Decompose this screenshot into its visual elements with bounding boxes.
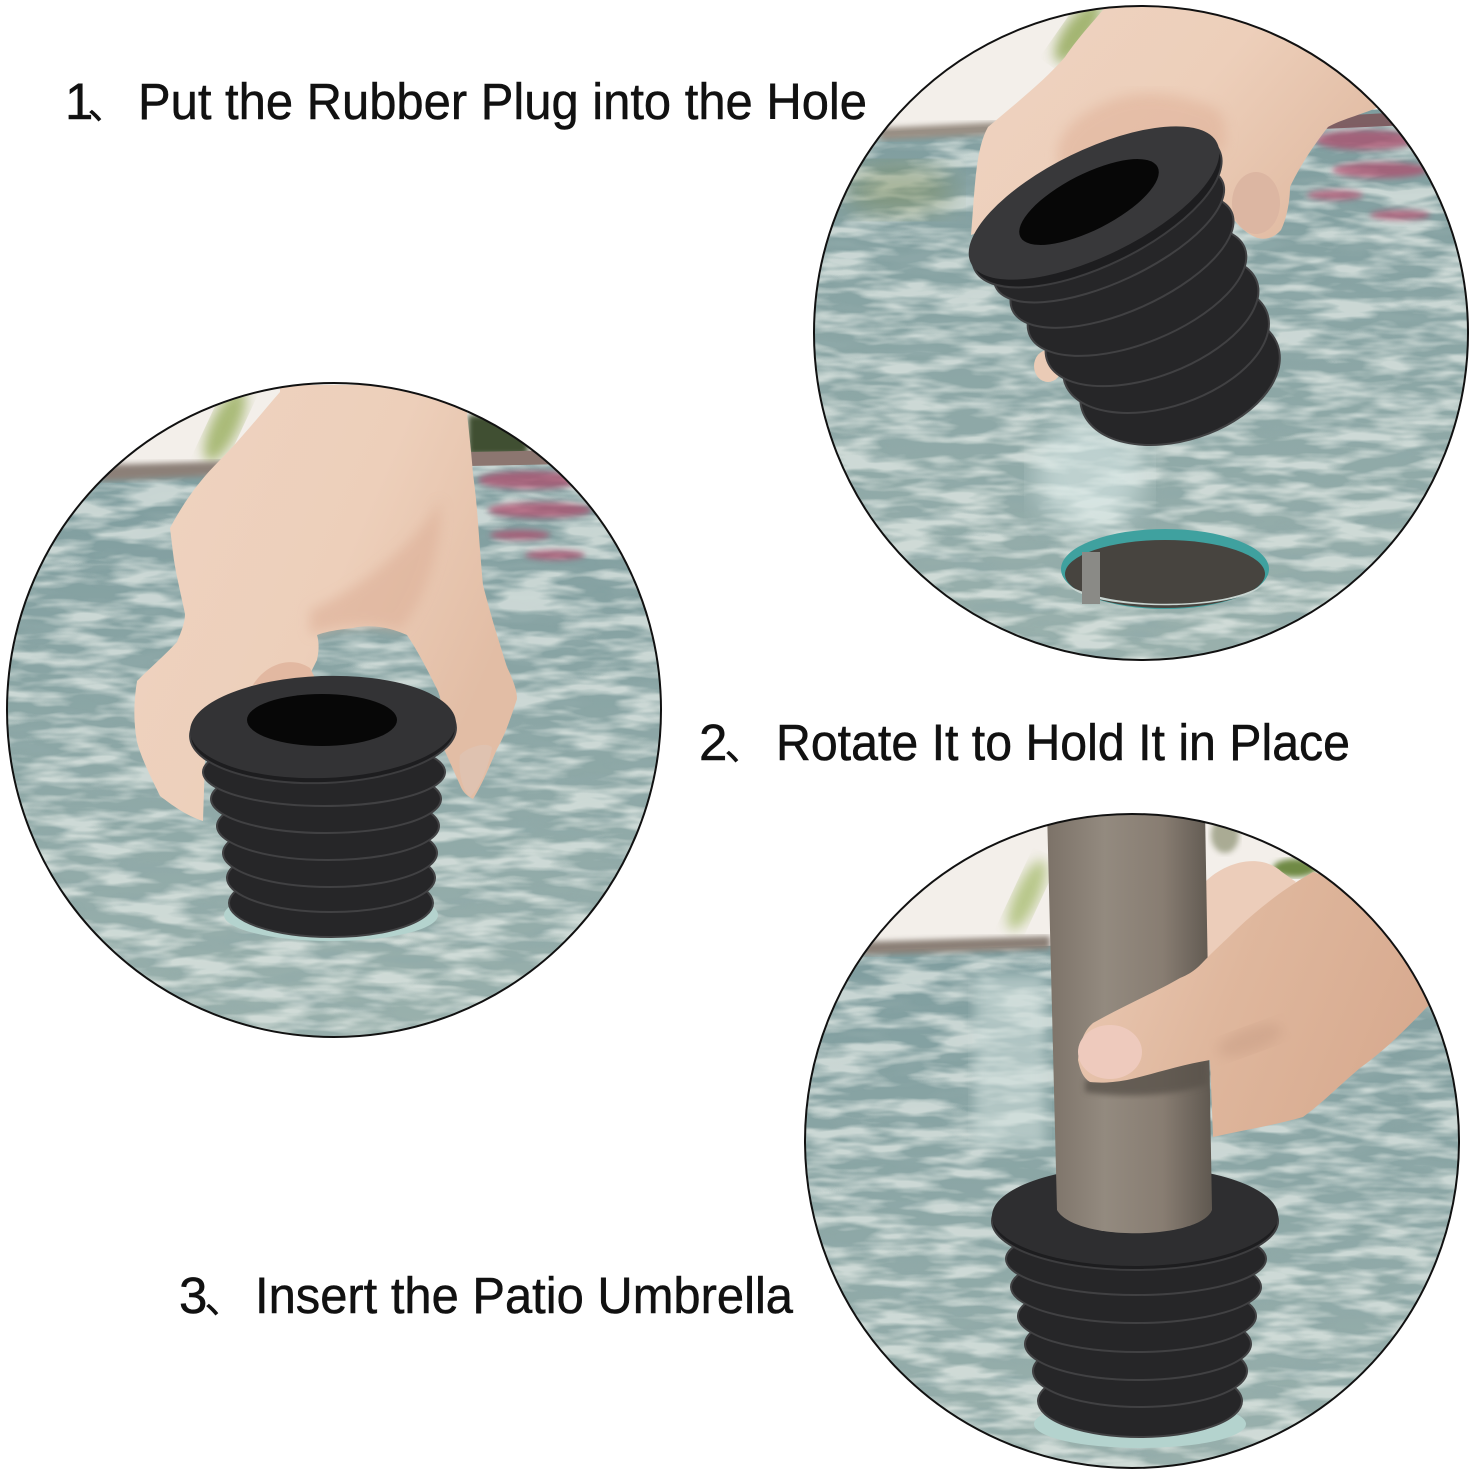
icon: rim of table hole [1034, 1414, 1246, 1448]
icon: fingertip behind plug [1034, 350, 1059, 382]
icon: pink reflection [478, 471, 592, 560]
title: step 3 instruction: 、 [204, 1275, 246, 1322]
icon: fingers behind pole [1205, 861, 1296, 960]
title: step 1 instruction: 1 [65, 73, 93, 130]
icon: black rubber plug [188, 671, 458, 937]
icon: hand gripping plug [134, 385, 517, 821]
icon: palm shading [1057, 94, 1226, 170]
icon: thumb nail [1078, 1025, 1142, 1079]
title: step 3 instruction: Insert the Patio Umbrella [255, 1267, 794, 1324]
icon: black rubber plug, tilted [968, 126, 1281, 446]
title: step 2 instruction: Rotate It to Hold It in Place [776, 714, 1350, 771]
icon: finger crease shading [1224, 1027, 1275, 1054]
icon: black rubber plug [992, 1166, 1278, 1437]
icon: thumb shadow on pole [1085, 1056, 1208, 1095]
title: step 1 instruction: 、 [87, 81, 129, 128]
photo circle: step 1, plug held above hole [810, 0, 1476, 670]
title: step 3 instruction: 3 [179, 1267, 207, 1324]
icon: rim of table hole [224, 907, 438, 941]
icon: fingernail [459, 745, 492, 797]
title: step 2 instruction: 、 [724, 722, 766, 769]
icon: pink reflection [1307, 130, 1430, 220]
icon: table hole [1061, 529, 1269, 609]
icon: hand holding plug [971, 0, 1379, 239]
title: step 2 instruction: 2 [699, 714, 727, 771]
icon: finger behind plug [253, 662, 316, 685]
title: step 1 instruction: Put the Rubber Plug into the Hole [138, 73, 867, 130]
icon: hand gripping pole [1078, 872, 1440, 1137]
photo circle: step 3, umbrella pole inserted [800, 810, 1476, 1476]
icon: knuckle shading [310, 500, 441, 635]
icon: thumb nail [1232, 172, 1280, 234]
icon: umbrella pole [1047, 810, 1212, 1233]
photo circle: step 2, plug rotated in hole [0, 380, 670, 1045]
